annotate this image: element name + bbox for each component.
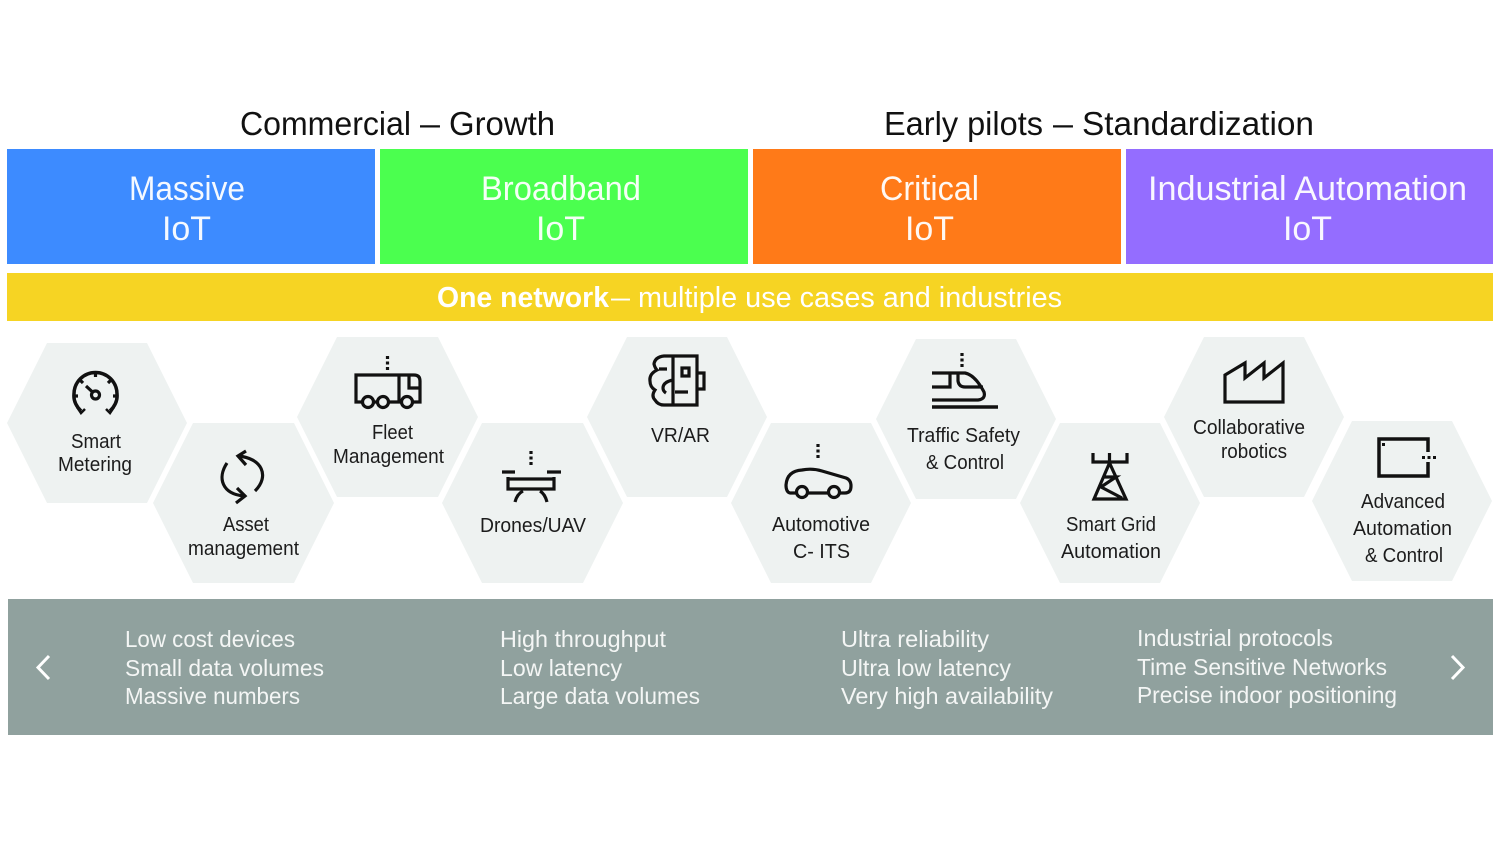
hexagon: advanced automation	[1312, 421, 1492, 581]
hexagon: smart grid: Automation	[1061, 541, 1161, 563]
icon: factory	[1225, 363, 1283, 402]
hexagon: smart grid: Smart Grid	[1066, 514, 1156, 536]
text block: industrial requirements: Industrial protocols	[1137, 625, 1333, 651]
panel: industrial automation IoT: IoT	[1283, 210, 1332, 248]
icon: brain headset	[650, 356, 704, 405]
hexagon: collaborative robotics: Collaborative	[1193, 417, 1305, 439]
hexagon: VR/AR	[587, 337, 767, 497]
text block: critical requirements	[841, 626, 1053, 709]
panel: industrial automation IoT: Industrial Automation	[1148, 170, 1467, 208]
hexagon: traffic safety: Traffic Safety	[907, 425, 1020, 447]
icon: refresh arrows	[222, 451, 263, 503]
hexagon: smart metering: Smart	[71, 431, 121, 453]
panel: massive IoT	[7, 149, 375, 264]
icon: connected car	[786, 444, 851, 498]
heading: early pilots standardization: Early pilots	[884, 105, 1043, 142]
banner: one network: One network	[437, 282, 610, 314]
panel: massive IoT: IoT	[162, 210, 211, 248]
hexagon: automotive C-ITS: Automotive	[772, 514, 870, 536]
text block: broadband requirements: Large data volumes	[500, 683, 700, 709]
text block: industrial requirements	[1137, 625, 1397, 708]
panel: industrial automation IoT	[1126, 149, 1493, 264]
panel: critical IoT: Critical	[880, 170, 979, 208]
text block: massive requirements: Small data volumes	[125, 655, 324, 681]
hexagon: smart metering: Metering	[58, 454, 132, 476]
panel: critical IoT	[753, 149, 1121, 264]
panel: massive IoT: Massive	[129, 170, 245, 208]
icon: drone	[502, 451, 561, 502]
text block: critical requirements: Very high availability	[841, 683, 1053, 709]
hexagon: fleet management: Management	[333, 446, 444, 468]
hexagon: automotive C-ITS	[731, 423, 911, 583]
panel: requirements bar	[8, 599, 1493, 735]
icon: gauge	[74, 372, 117, 413]
heading: commercial growth: Growth	[449, 105, 555, 142]
hexagon: collaborative robotics	[1164, 337, 1344, 497]
panel: broadband IoT: Broadband	[481, 170, 641, 208]
text block: broadband requirements: High throughput	[500, 626, 666, 652]
text block: critical requirements: Ultra low latency	[841, 655, 1011, 681]
arrow: right chevron	[1452, 656, 1463, 679]
hexagon: asset management: management	[188, 538, 299, 560]
hexagon: asset management: Asset	[223, 514, 269, 536]
icon: tablet frame	[1379, 439, 1436, 476]
hexagon: advanced automation: Automation	[1353, 518, 1452, 540]
hexagon: drones	[442, 423, 623, 583]
text block: industrial requirements: Time Sensitive Networks	[1137, 654, 1387, 680]
hexagon: traffic safety	[876, 339, 1056, 499]
hexagon: automotive C-ITS: C- ITS	[793, 541, 850, 563]
panel: critical IoT: IoT	[905, 210, 954, 248]
heading: early pilots standardization: –	[1053, 105, 1074, 142]
hexagon: traffic safety: & Control	[926, 452, 1004, 474]
hexagon: collaborative robotics: robotics	[1221, 441, 1287, 463]
icon: pylon	[1093, 453, 1127, 499]
hexagon: smart grid	[1020, 423, 1200, 583]
text block: broadband requirements	[500, 626, 700, 709]
hexagon: VR/AR: VR/AR	[651, 425, 710, 447]
text block: broadband requirements: Low latency	[500, 655, 622, 681]
text block: critical requirements: Ultra reliability	[841, 626, 989, 652]
icon: truck	[356, 356, 420, 408]
hexagon: drones: Drones/UAV	[480, 515, 587, 537]
icon: train	[932, 353, 998, 407]
heading: commercial growth	[240, 105, 555, 142]
heading: commercial growth: Commercial	[240, 105, 411, 142]
panel: broadband IoT	[380, 149, 748, 264]
text block: massive requirements: Low cost devices	[125, 626, 295, 652]
hexagon: fleet management	[297, 337, 478, 497]
text block: massive requirements: Massive numbers	[125, 683, 300, 709]
banner: one network	[7, 273, 1493, 321]
hexagon: advanced automation: & Control	[1365, 545, 1443, 567]
heading: early pilots standardization	[884, 105, 1314, 142]
hexagon: fleet management: Fleet	[372, 422, 413, 444]
panel: broadband IoT: IoT	[536, 210, 585, 248]
heading: commercial growth: –	[420, 105, 441, 142]
banner: one network: –	[611, 282, 631, 314]
hexagon: smart metering	[7, 343, 187, 503]
heading: early pilots standardization: Standardization	[1082, 105, 1314, 142]
banner: one network: multiple use cases and industries	[638, 282, 1062, 314]
arrow: left chevron	[38, 656, 49, 679]
text block: massive requirements	[125, 626, 324, 709]
hexagon: asset management	[153, 423, 334, 583]
text block: industrial requirements: Precise indoor positioning	[1137, 682, 1397, 708]
hexagon: advanced automation: Advanced	[1361, 491, 1445, 513]
